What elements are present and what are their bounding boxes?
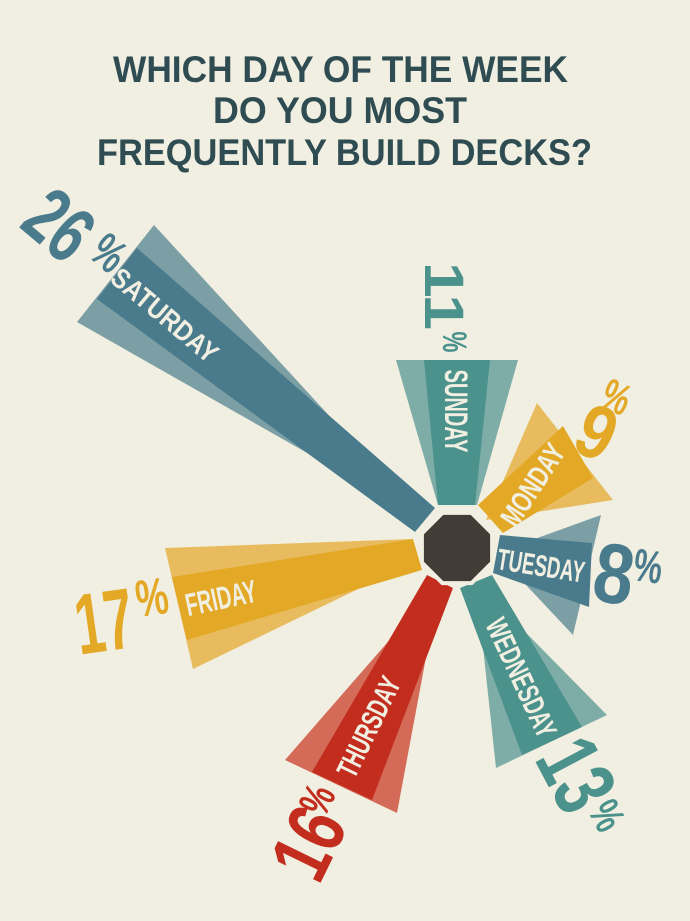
value: 17%: % xyxy=(132,566,172,629)
ray: friday xyxy=(165,539,422,669)
value: 17%: 17 xyxy=(69,570,140,674)
ray: saturday: SATURDAY xyxy=(105,262,225,369)
value: 9%: % xyxy=(593,370,639,426)
value: 9%: 9 xyxy=(562,387,631,479)
ray: wednesday xyxy=(460,575,607,768)
value: 26%: % xyxy=(80,222,138,283)
ray: friday: FRIDAY xyxy=(182,573,260,623)
ray: thursday xyxy=(285,575,453,813)
center octagon xyxy=(422,513,492,583)
ray: tuesday: TUESDAY xyxy=(495,543,587,590)
value: 11%: 11 xyxy=(413,262,476,330)
value: 11%: % xyxy=(435,331,473,353)
value: 16%: 16 xyxy=(253,793,365,894)
ray: sunday: SUNDAY xyxy=(438,369,474,453)
title: FREQUENTLY BUILD DECKS? xyxy=(97,132,592,173)
value: 13%: % xyxy=(578,793,634,840)
value: 26%: 26 xyxy=(7,171,112,279)
ray: thursday: THURSDAY xyxy=(331,671,408,783)
ray: wednesday: WEDNESDAY xyxy=(479,613,563,743)
value: 11% xyxy=(413,262,476,353)
title xyxy=(97,49,592,173)
title: DO YOU MOST xyxy=(213,90,467,131)
value: 16%: % xyxy=(290,777,346,823)
value: 13%: 13 xyxy=(517,721,636,828)
title: WHICH DAY OF THE WEEK xyxy=(113,49,568,90)
ray: sunday xyxy=(396,360,518,505)
ray: saturday xyxy=(77,225,435,532)
value: 8%: % xyxy=(630,540,666,594)
ray: tuesday xyxy=(493,515,601,635)
value: 8%: 8 xyxy=(587,525,640,624)
ray: monday: MONDAY xyxy=(495,438,572,533)
